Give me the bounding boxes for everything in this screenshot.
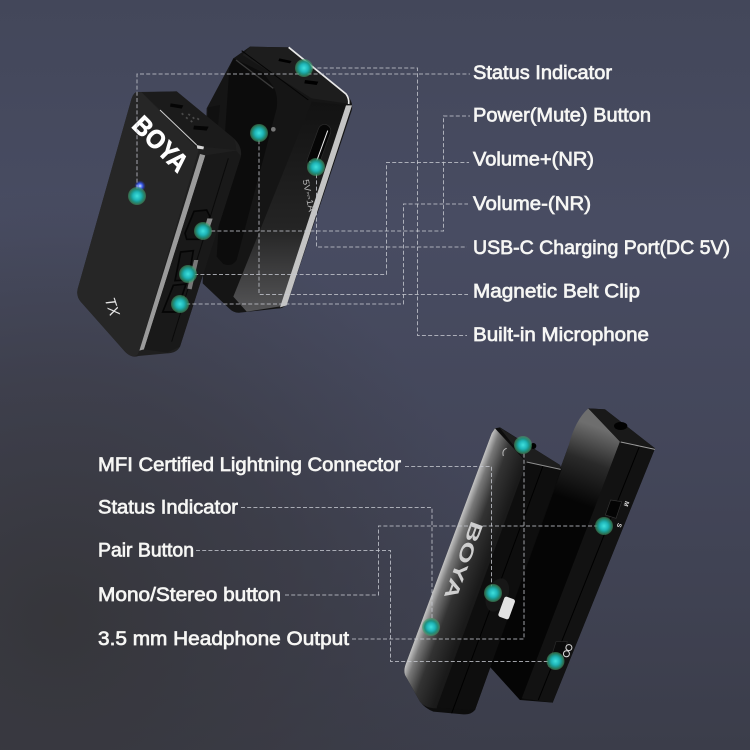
device: receiver rear: S	[615, 522, 623, 528]
label text: Built-in Microphone	[473, 324, 649, 346]
device: receiver rear: M	[622, 500, 630, 507]
label text: Volume+(NR)	[473, 148, 594, 170]
leader line	[285, 526, 603, 595]
marker dot	[179, 265, 197, 283]
leader line	[196, 550, 555, 662]
USB-C port	[305, 123, 333, 169]
top grille	[170, 103, 183, 109]
callout: Status Indicator (receiver)	[98, 496, 440, 636]
brand: BOYA	[126, 110, 195, 178]
label text: Mono/Stereo button	[98, 584, 281, 606]
device: receiver front with Lightning connector	[404, 427, 562, 714]
label text: Power(Mute) Button	[473, 104, 651, 126]
marker dot	[194, 222, 212, 240]
leader line	[405, 466, 492, 592]
marker dot	[514, 436, 532, 454]
brand: BOYA	[440, 519, 488, 603]
label text: Magnetic Belt Clip	[473, 280, 640, 302]
marker dot	[484, 584, 502, 602]
leader line	[180, 204, 468, 304]
pair icon	[563, 644, 573, 658]
device: TX transmitter front	[77, 91, 241, 357]
callout: 3.5 mm Headphone Output	[98, 436, 532, 650]
callout: Pair Button	[98, 540, 564, 670]
leader line	[241, 508, 432, 627]
clip	[217, 58, 277, 265]
marker dot	[171, 295, 189, 313]
marker dot	[128, 187, 146, 205]
leader line	[137, 74, 470, 195]
label text: MFI Certified Lightning Connector	[98, 454, 402, 476]
label text: Volume-(NR)	[473, 193, 591, 215]
callout: Status Indicator (transmitter)	[128, 62, 613, 205]
callout: Built-in Microphone	[295, 59, 649, 346]
marker dot	[295, 59, 313, 77]
callout: Mono/Stereo button	[98, 517, 613, 606]
leader line	[316, 168, 467, 247]
label text: Status Indicator	[98, 496, 239, 518]
marker dot	[250, 124, 268, 142]
top grille	[278, 58, 292, 63]
callout: MFI Certified Lightning Connector	[98, 454, 502, 602]
leader line	[205, 116, 470, 231]
voltage text: 5V⎓1A	[301, 178, 317, 212]
device: receiver rear	[488, 408, 655, 703]
device: transmitter rear with belt clip	[203, 47, 352, 313]
callout: Volume-(NR)	[171, 193, 591, 313]
label text: USB-C Charging Port(DC 5V)	[473, 237, 730, 259]
mono stereo switch	[605, 500, 622, 518]
marker dot	[595, 517, 613, 535]
leader line	[305, 68, 467, 336]
pair button	[548, 642, 567, 667]
label text: Status Indicator	[473, 62, 613, 84]
leader line	[188, 162, 469, 274]
Lightning plug	[481, 575, 514, 615]
status LED	[134, 180, 146, 192]
label text: 3.5 mm Headphone Output	[98, 628, 350, 650]
callout: Magnetic Belt Clip	[250, 124, 640, 302]
leader line	[259, 134, 468, 294]
marker dot	[307, 158, 325, 176]
side buttons	[185, 210, 210, 239]
callout: USB-C Charging Port	[307, 158, 730, 259]
callout: Volume+(NR)	[179, 148, 594, 283]
marker dot	[422, 618, 440, 636]
leader line	[352, 446, 524, 639]
callout: Power(Mute) Button	[194, 104, 651, 240]
TX mark: TX	[101, 296, 122, 320]
marker dot	[546, 652, 564, 670]
label text: Pair Button	[98, 540, 194, 562]
